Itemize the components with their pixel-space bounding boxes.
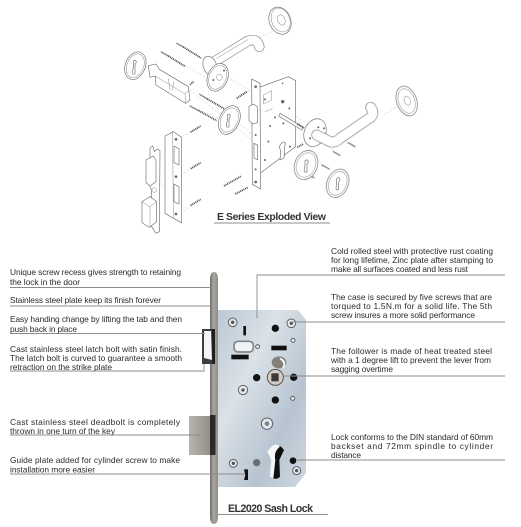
callout: deadbolt: Cast stainless steel deadbolt is completely [10,417,181,427]
callout: DIN standard: distance [331,450,361,460]
screws: lower lock [224,176,248,194]
screws: strike plate [191,126,201,205]
rosette: upper with spindle [203,60,232,94]
callout: guide plate: Guide plate added for cylinder screw to make [10,455,180,465]
heading underline [218,514,328,516]
callout: deadbolt [10,417,181,436]
exploded view diagram [121,4,421,233]
callout: latch bolt: Cast stainless steel latch bolt with satin finish. [10,344,182,354]
rosette: top right [265,4,295,38]
case [218,310,306,487]
rosette: far right [392,83,421,119]
rosette: right with handle [300,115,330,150]
rosette: lower keyhole inner [290,147,322,183]
strike box and keeper [142,146,160,233]
screws: middle pair [190,91,247,121]
screws: right small [307,143,355,178]
lock photograph [189,272,306,524]
slider tab [234,341,253,352]
callout: follower: with a 1 degree lift to prevent the lever from [330,355,491,365]
callout: case screws: torqued to 1.5N.m for a solid life. The 5th [331,301,492,311]
callout: screw recess: the lock in the door [10,277,80,287]
callout: stainless plate: Stainless steel plate keep its finish forever [10,295,161,305]
callout: case screws: The case is secured by five screws that are [331,292,492,302]
case details [228,318,301,480]
callout leader lines [10,275,505,474]
callout: handing change: push back in place [10,324,77,334]
callout: follower: sagging overtime [331,364,393,374]
callout: latch bolt: The latch bolt is curved to guarantee a smooth [10,353,182,363]
euro cylinder [148,64,190,103]
heading underline [214,222,330,224]
deadbolt [189,416,214,455]
assembly guide lines [142,25,407,213]
heading: EL2020 Sash Lock: EL2020 Sash Lock [228,503,313,515]
callout: latch bolt: retraction on the strike plate [10,362,112,372]
callout: DIN standard: Lock conforms to the DIN standard of 60mm [331,432,493,442]
keyhole [270,445,284,479]
rosette: left keyhole [121,49,150,83]
mortise lock body [249,77,304,189]
callout: follower [330,346,492,374]
screws: upper pair [161,43,201,85]
follower [272,356,286,368]
callout: cold rolled steel [331,246,493,274]
callout: guide plate [10,455,180,474]
callout: handing change: Easy handing change by lifting the tab and then [10,314,182,324]
screws and bosses [228,318,301,475]
callout: screw recess: Unique screw recess gives strength to retaining [10,267,181,277]
callout: case screws [331,292,492,320]
rosette: lower keyhole outer [322,166,353,201]
callout: latch bolt [10,344,182,372]
rosette: middle keyhole [214,102,245,138]
callout: DIN standard: backset and 72mm spindle to cylinder [331,441,493,451]
callout: case screws: screw insures a more solid performance [331,310,475,320]
callout: screw recess [10,267,181,287]
callout: DIN standard [331,432,493,460]
callout: guide plate: installation more easier [10,464,95,474]
callout: follower: The follower is made of heat treated steel [331,346,492,356]
callout: cold rolled steel: make all surfaces coated and less rust [331,264,469,274]
strike plate [165,132,182,223]
callout: deadbolt: thrown in one turn of the key [10,426,116,436]
heading: E Series Exploded View: E Series Exploded View [217,212,327,223]
lever handle: lower [317,107,373,142]
callout: cold rolled steel: for long lifetime, Zinc plate after stamping to [331,255,493,265]
callout: cold rolled steel: Cold rolled steel with protective rust coating [331,246,493,256]
lever handle: upper [200,39,259,78]
faceplate [210,272,218,524]
deadbolt shadow [210,415,216,455]
callout: handing change [10,314,182,334]
latch bolt [202,329,215,364]
